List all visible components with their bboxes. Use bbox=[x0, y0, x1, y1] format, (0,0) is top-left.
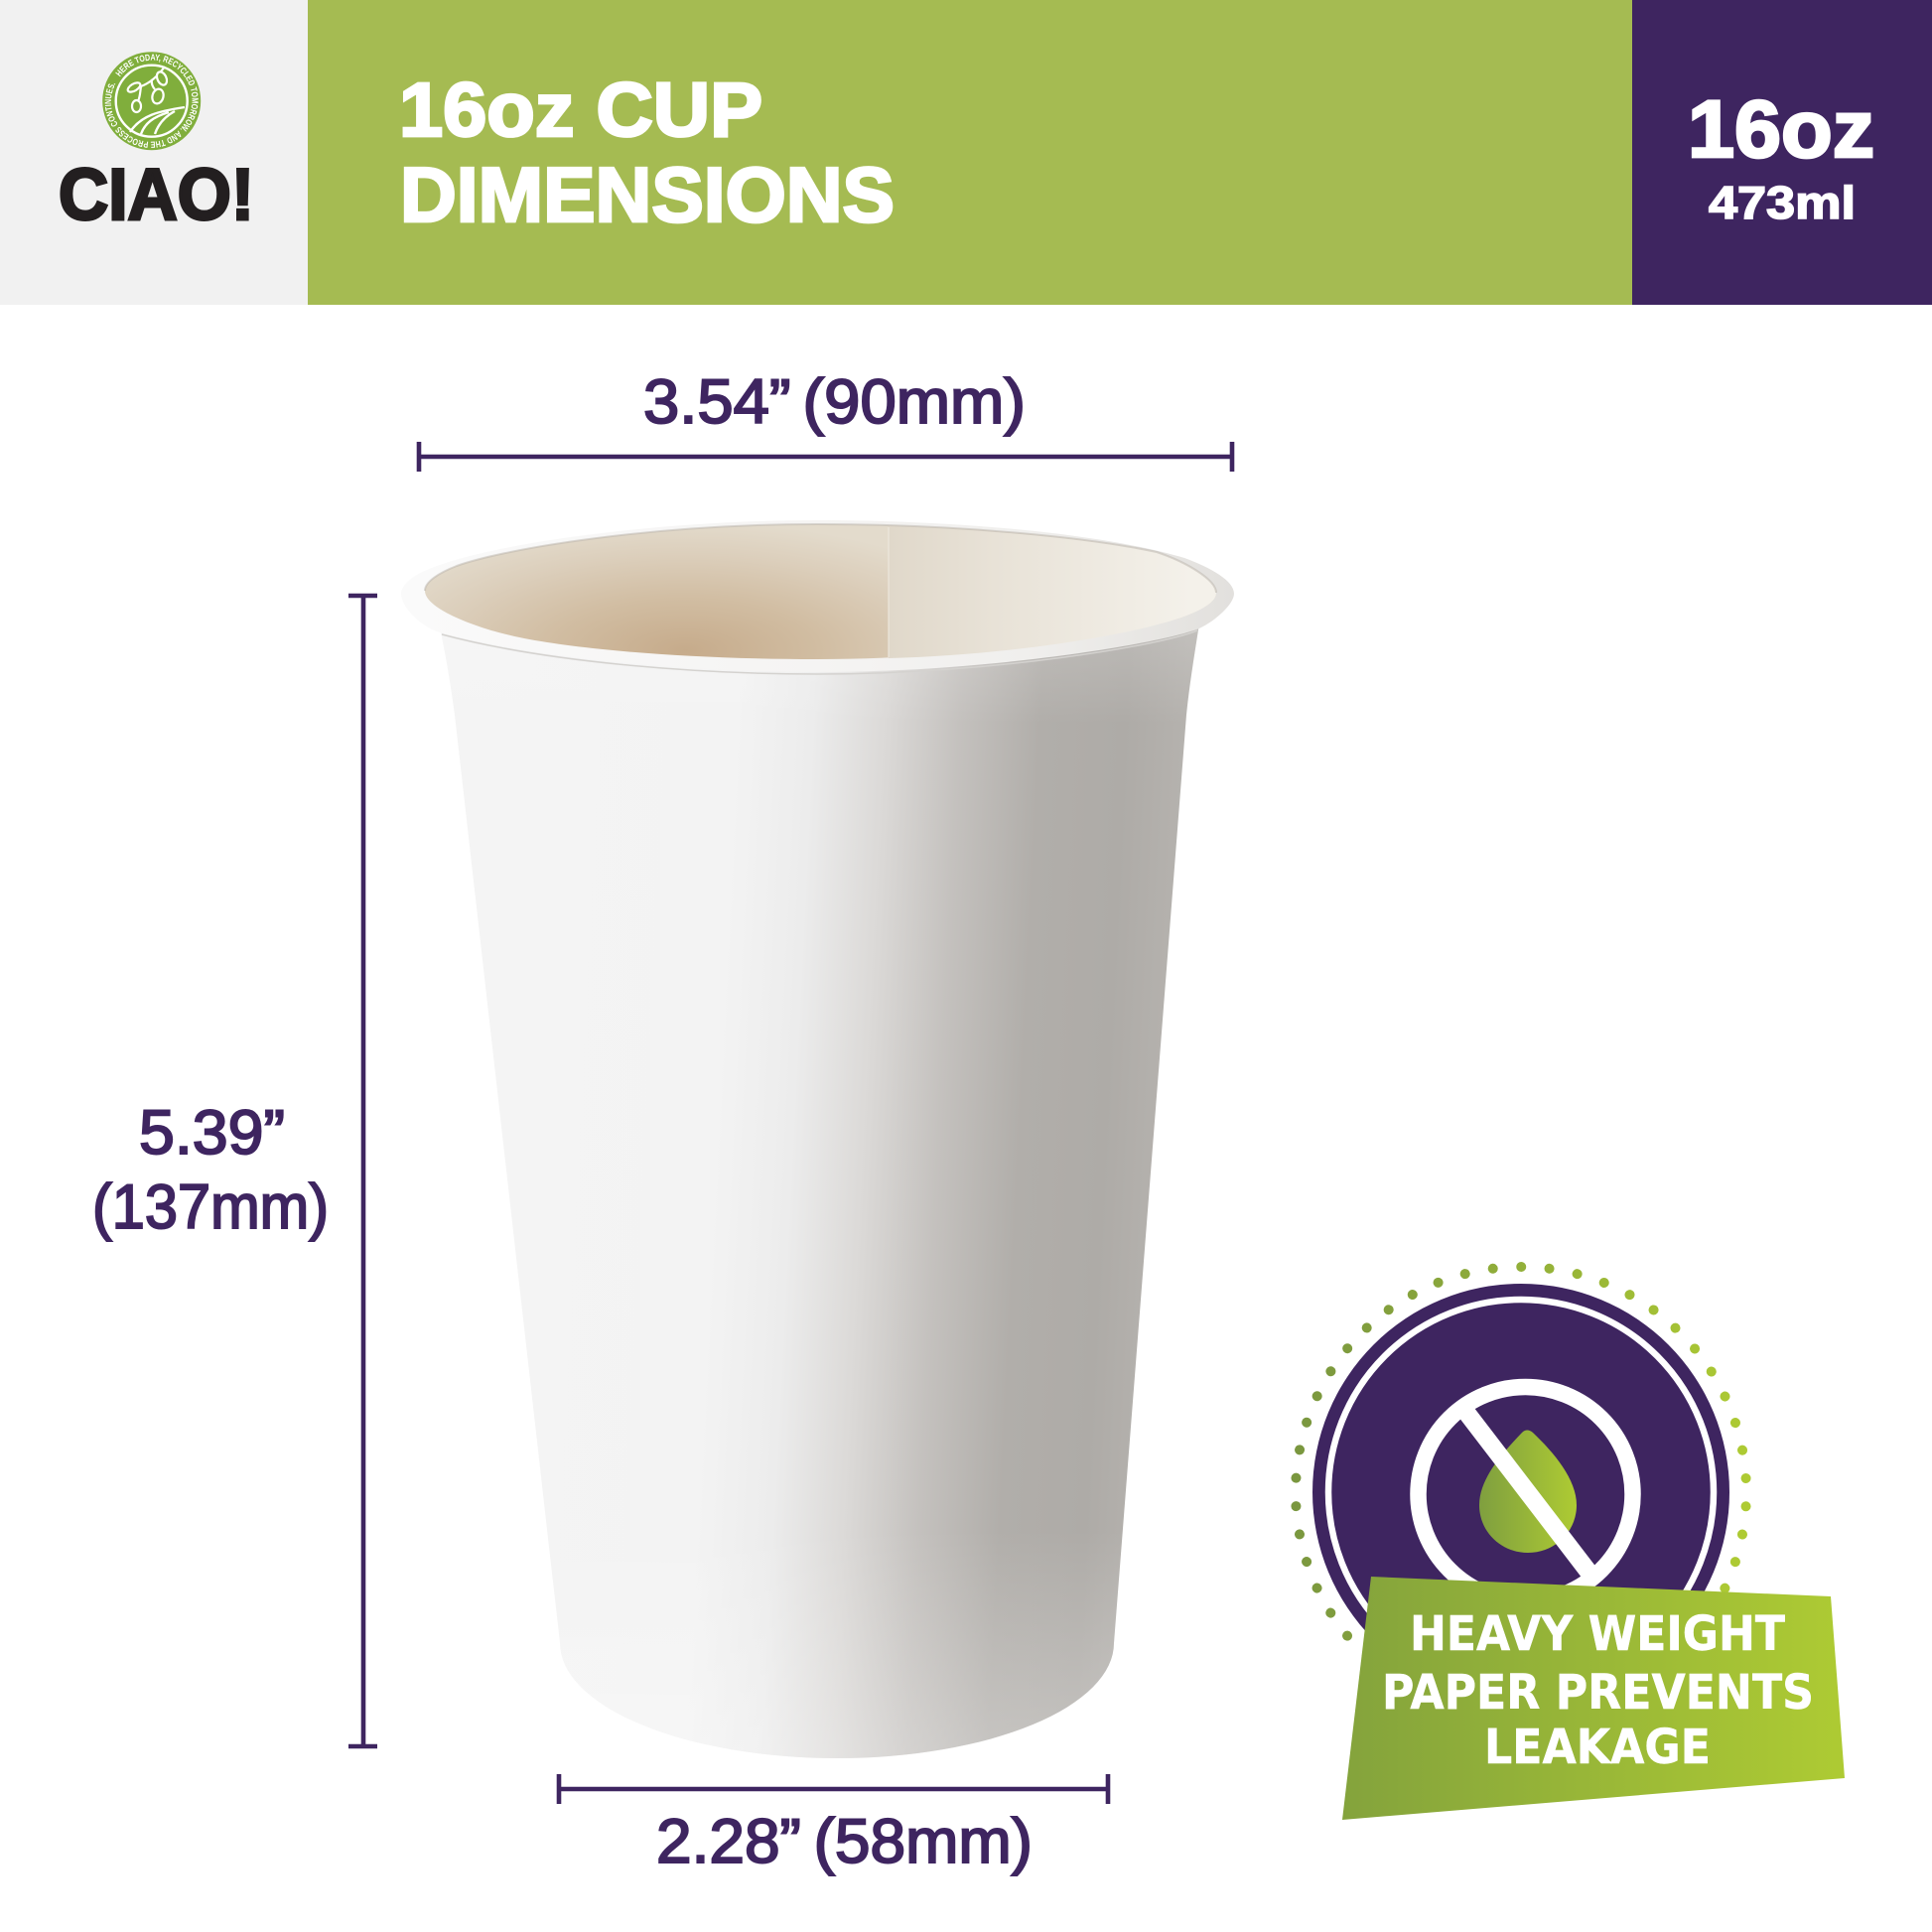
purple disc bbox=[1312, 1284, 1729, 1701]
interior seam bbox=[888, 527, 890, 657]
icon: prohibited water drop bbox=[1418, 1387, 1632, 1601]
capacity oz: 16oz bbox=[1688, 84, 1874, 175]
icon: drop bbox=[1479, 1430, 1577, 1553]
cup interior bbox=[425, 524, 1216, 659]
cup rim bbox=[401, 520, 1234, 672]
logo panel bbox=[0, 0, 308, 305]
bottom width arrow bbox=[559, 1774, 1108, 1804]
logo wordmark: CIAO! bbox=[59, 155, 254, 235]
banner line 3: LEAKAGE bbox=[1484, 1720, 1711, 1775]
interior right half bbox=[889, 526, 1216, 658]
title line 1: 16oz CUP bbox=[399, 68, 762, 153]
title panel bbox=[308, 0, 1632, 305]
banner line 2: PAPER PREVENTS bbox=[1382, 1665, 1814, 1721]
capacity panel bbox=[1632, 0, 1932, 305]
header band bbox=[0, 0, 1932, 305]
title line 2: DIMENSIONS bbox=[400, 151, 895, 238]
top width label: 3.54” (90mm) bbox=[643, 367, 1026, 437]
prohibition slash bbox=[1461, 1406, 1594, 1580]
top width dimension bbox=[419, 367, 1232, 472]
ribbon banner bbox=[1342, 1577, 1845, 1820]
logo emblem: HERE TODAY, RECYCLED TOMORROW. AND THE PROCESS CONTINUES. bbox=[105, 54, 199, 148]
prohibition circle bbox=[1418, 1387, 1632, 1601]
leakage badge bbox=[1282, 1253, 1845, 1820]
dotted ring bbox=[1282, 1253, 1760, 1731]
rim underside shadow bbox=[442, 630, 1197, 674]
white ring bbox=[1328, 1300, 1714, 1685]
capacity ml: 473ml bbox=[1709, 177, 1856, 228]
bottom width label: 2.28” (58mm) bbox=[656, 1807, 1033, 1876]
cup body bbox=[427, 616, 1221, 1767]
height inches label: 5.39” bbox=[139, 1098, 285, 1168]
banner line 1: HEAVY WEIGHT bbox=[1410, 1606, 1785, 1662]
bottom width dimension bbox=[559, 1774, 1108, 1876]
paper cup bbox=[401, 520, 1234, 1767]
height arrow bbox=[348, 596, 377, 1746]
height mm label: (137mm) bbox=[92, 1173, 329, 1242]
top width arrow bbox=[419, 442, 1232, 472]
inner rim shading bbox=[425, 524, 1216, 593]
height dimension bbox=[92, 596, 377, 1746]
